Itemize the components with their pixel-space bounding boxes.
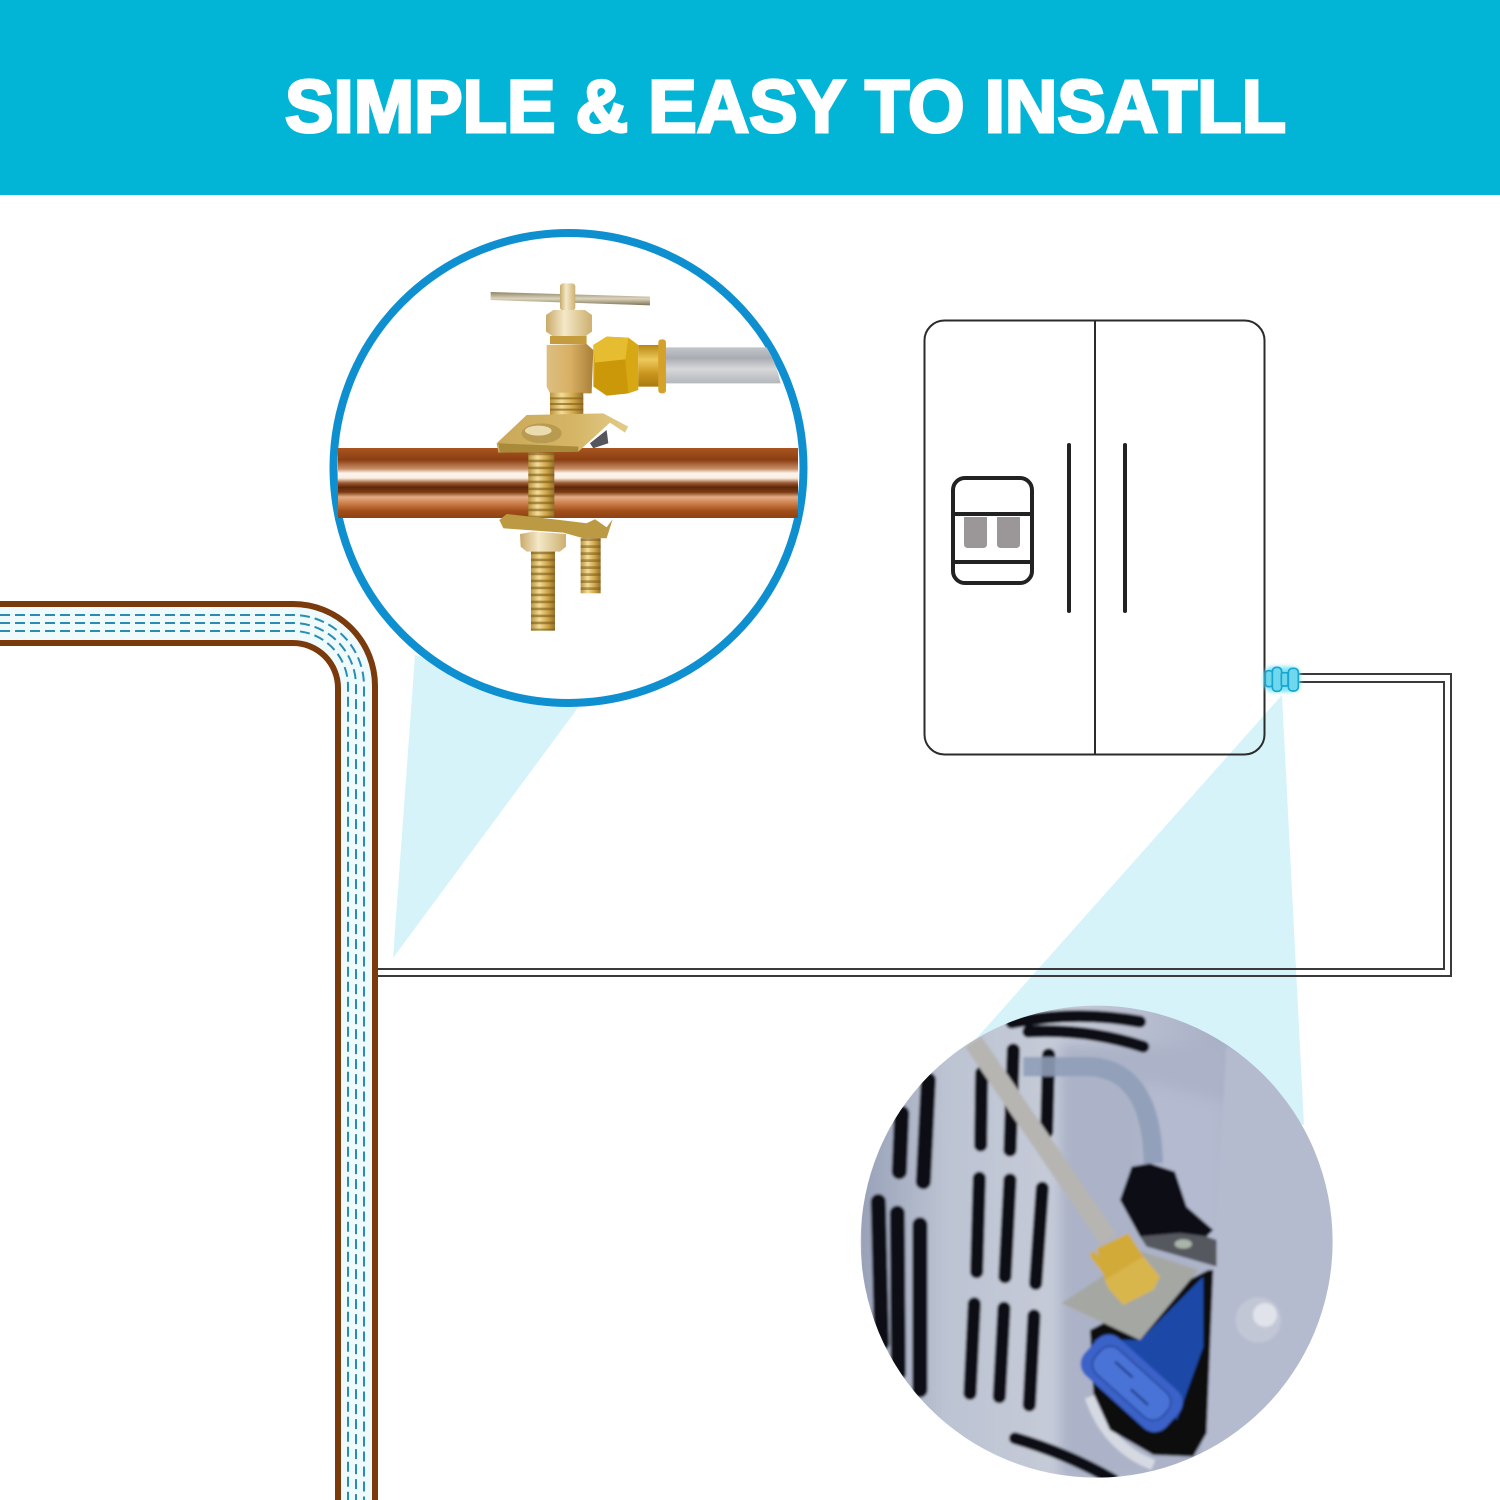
valve handle bbox=[491, 283, 650, 311]
lower bolt bbox=[531, 552, 555, 631]
callout circle: fridge water inlet photo bbox=[860, 1000, 1340, 1480]
upper clamp bbox=[497, 413, 628, 453]
header banner bbox=[0, 0, 1500, 195]
copper pipe bbox=[338, 448, 798, 518]
grey supply tube bbox=[665, 347, 781, 383]
water line to fridge bbox=[378, 674, 1451, 976]
brass compression nut bbox=[593, 337, 666, 396]
second bolt bbox=[581, 538, 601, 593]
dome rivet bbox=[1236, 1297, 1281, 1343]
callout cone: valve bbox=[393, 655, 580, 958]
mounting bracket bbox=[1062, 1247, 1198, 1340]
title: SIMPLE & EASY TO INSATLL bbox=[285, 65, 1286, 148]
grey water tube bbox=[973, 1042, 1108, 1239]
vent slots bbox=[878, 1016, 1143, 1480]
refrigerator bbox=[924, 320, 1264, 755]
icon: inlet fitting bbox=[1264, 667, 1300, 692]
callout circle: saddle valve on copper pipe bbox=[334, 233, 804, 703]
lower clamp bbox=[499, 514, 613, 538]
long bolt bbox=[528, 453, 554, 518]
wall water pipe bbox=[0, 604, 375, 1500]
callout cone: fridge connection bbox=[975, 695, 1304, 1125]
bent rear water tube bbox=[1023, 1067, 1153, 1163]
saddle valve bbox=[491, 283, 781, 631]
water dispenser bbox=[953, 478, 1032, 583]
black opening bbox=[1120, 1163, 1213, 1237]
brass compression nut bbox=[1093, 1233, 1160, 1305]
valve body bbox=[546, 310, 593, 418]
metal back panel bbox=[860, 1006, 1240, 1478]
raised panel bbox=[1050, 1033, 1182, 1478]
hex nut bbox=[520, 532, 566, 552]
fridge door handles bbox=[1069, 445, 1125, 611]
recess and blue inlet bbox=[1074, 1270, 1213, 1465]
